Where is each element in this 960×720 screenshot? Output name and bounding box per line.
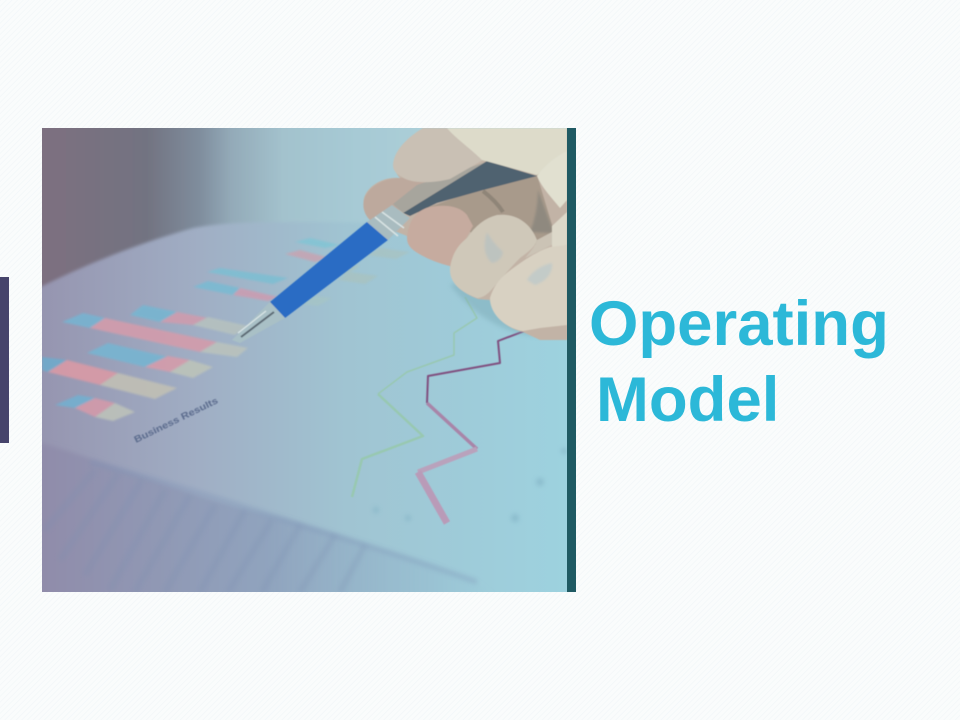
right knuckle xyxy=(537,151,567,208)
pen barrel xyxy=(403,161,537,216)
ring finger xyxy=(450,215,537,298)
paper surface xyxy=(42,220,567,592)
blue pen xyxy=(232,205,410,343)
hand shadow xyxy=(452,284,526,335)
green line chart xyxy=(352,297,477,497)
hand holding the pen xyxy=(363,128,580,340)
hand base silhouette xyxy=(363,128,580,340)
shaded knuckles xyxy=(431,175,552,240)
title xyxy=(589,289,889,435)
finger segment between ring and right knuckle xyxy=(525,232,552,258)
joint beside ring finger xyxy=(552,212,567,248)
faint dots on the paper xyxy=(373,448,567,522)
palm xyxy=(447,128,567,175)
ring fingernail xyxy=(485,232,503,263)
title: Model xyxy=(596,365,779,435)
desk in the background xyxy=(42,128,422,288)
left accent bar xyxy=(0,277,9,443)
chart caption on the paper: Business Results xyxy=(132,395,220,445)
middle finger xyxy=(407,206,473,266)
index finger xyxy=(393,128,483,182)
photo: hand pointing a pen at printed charts xyxy=(30,118,580,600)
far finger xyxy=(364,178,421,220)
vertical teal divider xyxy=(567,128,576,592)
metal tip xyxy=(232,302,285,343)
bar charts on the paper xyxy=(42,238,410,421)
document below the paper edge xyxy=(42,446,477,592)
pinky finger xyxy=(490,245,567,331)
ring band xyxy=(483,191,503,212)
dark under palm xyxy=(530,190,552,233)
title: Operating xyxy=(589,289,889,359)
transparent collar xyxy=(367,205,410,240)
red line chart xyxy=(415,331,524,525)
pinky fingernail xyxy=(527,263,552,285)
clear barrel highlight xyxy=(394,164,482,212)
pen grip xyxy=(270,222,388,318)
